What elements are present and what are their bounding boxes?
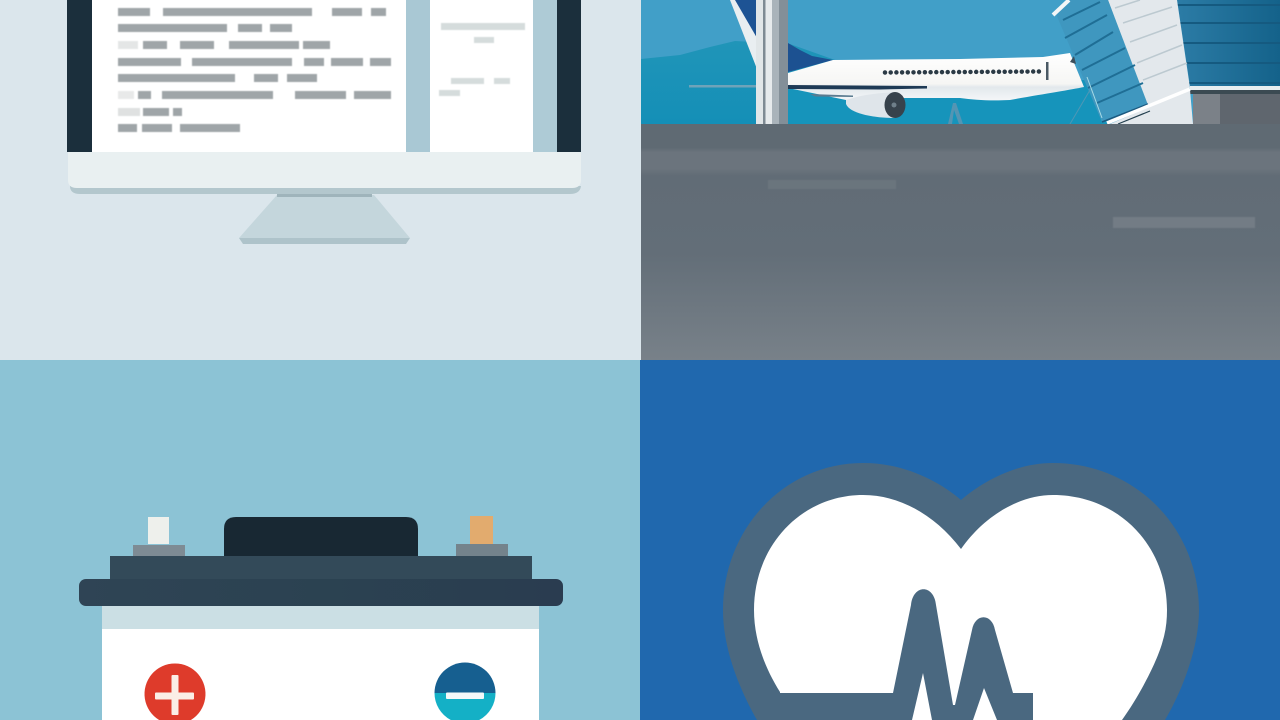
battery lid bbox=[79, 556, 563, 606]
fuselage bbox=[788, 53, 1084, 100]
engine bbox=[846, 92, 895, 118]
door bbox=[1046, 62, 1048, 80]
panel: car battery bbox=[0, 360, 640, 720]
windows bbox=[885, 72, 1040, 73]
positive terminal post bbox=[133, 517, 185, 556]
horizontal stabilizer bbox=[689, 85, 757, 88]
airplane bbox=[788, 53, 1084, 124]
tower glass facet bbox=[1056, 0, 1148, 122]
heart icon bbox=[723, 463, 1199, 720]
landing gear bbox=[948, 103, 963, 124]
panel: heart health bbox=[640, 360, 1280, 720]
heartbeat line bbox=[757, 589, 1033, 720]
monitor stand bbox=[239, 194, 410, 244]
tower lower white wall bbox=[1110, 90, 1193, 124]
battery body bbox=[102, 606, 539, 720]
negative symbol bbox=[434, 662, 496, 720]
wing line bbox=[788, 85, 927, 90]
blurred document text lines bbox=[118, 8, 391, 132]
panel: airport scene bbox=[641, 0, 1280, 360]
tower white facet bbox=[1108, 0, 1190, 105]
terminal building bbox=[1053, 0, 1280, 124]
runway marking left bbox=[768, 180, 896, 189]
monitor screen bbox=[67, 0, 581, 152]
negative terminal post bbox=[456, 516, 508, 556]
blurred sidebar text lines bbox=[439, 23, 525, 96]
airplane tail fin bbox=[730, 0, 833, 72]
cockpit window bbox=[1070, 56, 1076, 64]
monitor chin bbox=[68, 152, 581, 194]
tower trim bbox=[1053, 0, 1069, 15]
pole bbox=[756, 0, 788, 124]
runway marking right bbox=[1113, 217, 1255, 228]
runway bbox=[641, 124, 1280, 360]
distant hill and water bbox=[641, 41, 1110, 124]
positive symbol bbox=[144, 663, 206, 720]
panel: computer monitor bbox=[0, 0, 641, 360]
battery handle bbox=[224, 517, 418, 556]
